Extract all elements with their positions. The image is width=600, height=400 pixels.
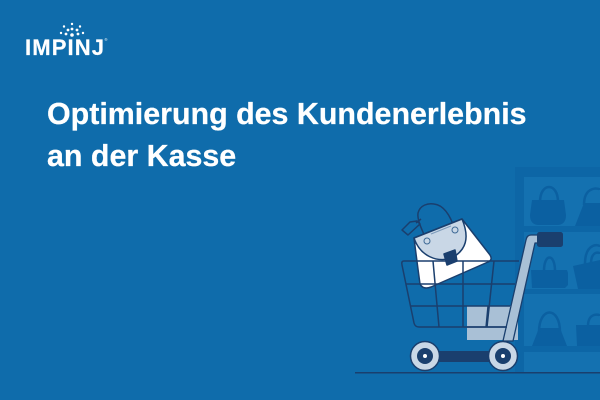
bag tag bbox=[402, 221, 420, 235]
bag handle bbox=[416, 204, 455, 241]
cart handle pole bbox=[503, 235, 540, 341]
bag clasp bbox=[444, 250, 457, 265]
shelf bag: top left bbox=[530, 187, 566, 225]
logo wordmark: IMPINJ bbox=[25, 35, 104, 60]
registered mark: ® bbox=[104, 37, 108, 42]
box in cart bbox=[467, 306, 518, 340]
shelf bag: middle right bbox=[573, 245, 600, 289]
cart handle grip bbox=[537, 232, 563, 247]
right wheel bbox=[488, 342, 518, 370]
bag rings bbox=[424, 238, 430, 244]
handbag in cart bbox=[402, 204, 491, 288]
logo dots bbox=[60, 23, 84, 37]
cart axle bbox=[425, 351, 503, 362]
logo bbox=[25, 23, 108, 60]
title: an der Kasse bbox=[47, 139, 236, 173]
shelf bag: middle left bbox=[531, 258, 568, 288]
title: Optimierung des Kundenerlebnis bbox=[47, 97, 527, 131]
cart basket bbox=[402, 261, 519, 327]
shelf bag: bottom left bbox=[532, 312, 567, 346]
left wheel bbox=[410, 342, 440, 370]
shelf bag: top right bbox=[575, 189, 600, 226]
shelf with handbags bbox=[515, 167, 600, 373]
bag body bbox=[414, 219, 491, 288]
shelf bag: bottom right bbox=[576, 315, 600, 346]
ground line bbox=[355, 372, 600, 374]
bag flap bbox=[414, 219, 466, 260]
